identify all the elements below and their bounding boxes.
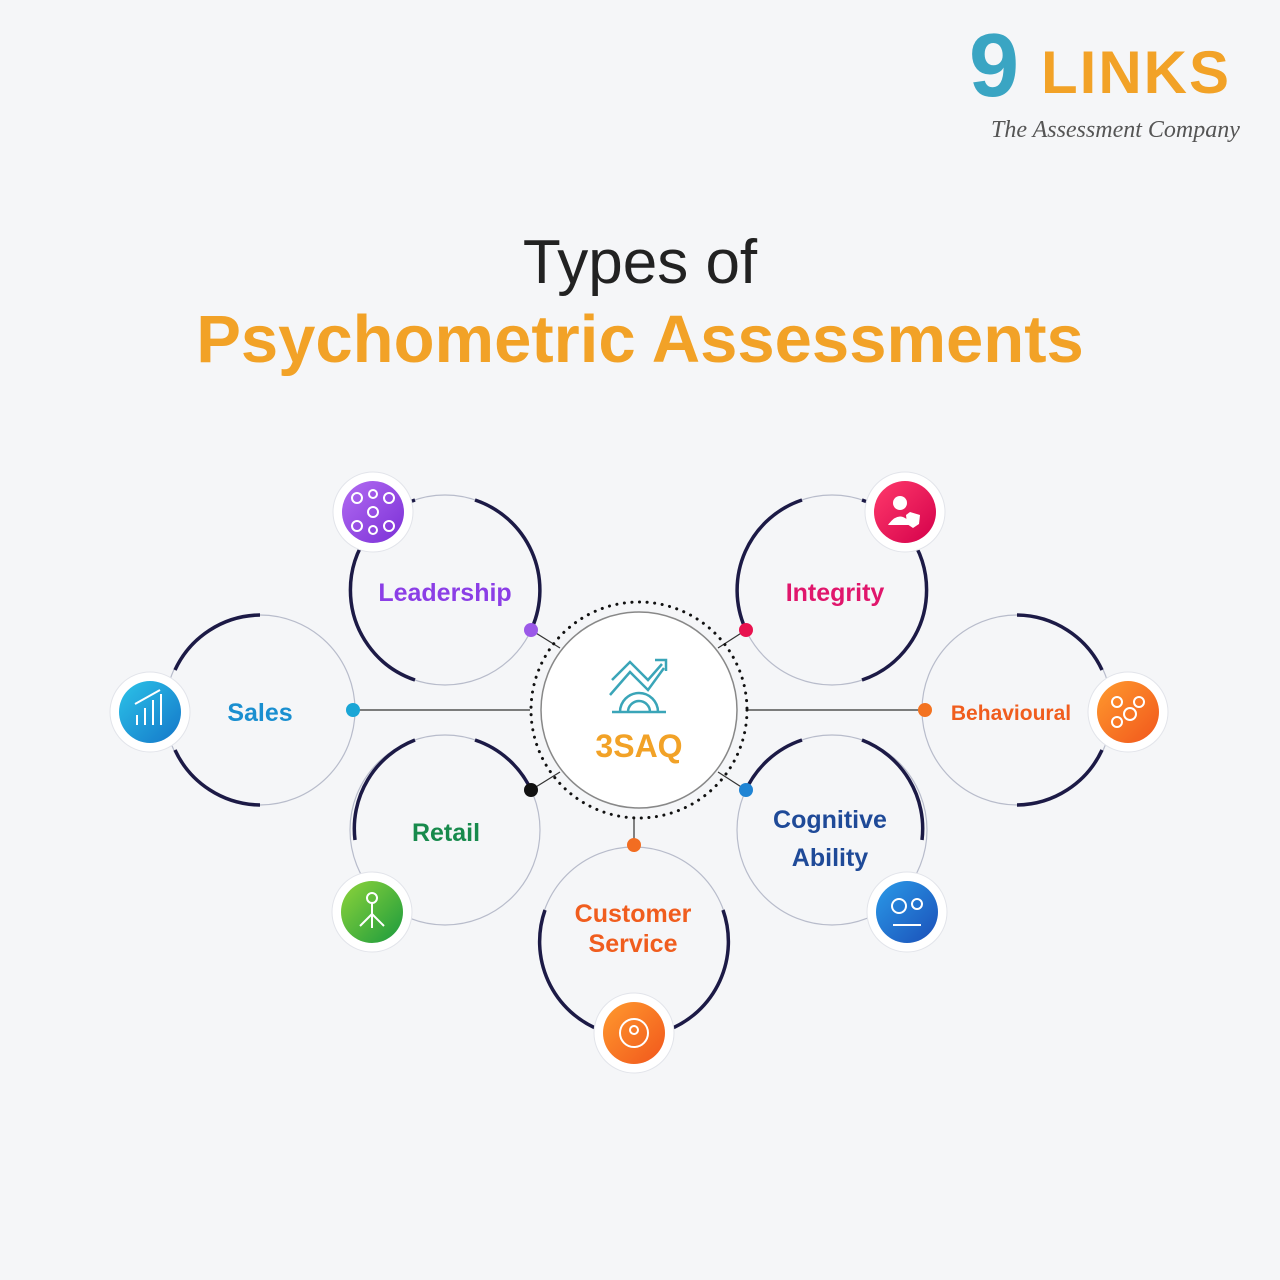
title [196, 228, 1084, 377]
center hub [531, 602, 747, 818]
icons [110, 472, 1168, 1073]
satellite circles [165, 495, 1112, 1037]
dots [346, 623, 932, 852]
title: Psychometric Assessments [196, 302, 1084, 377]
logo tagline: The Assessment Company [991, 117, 1240, 143]
connector lines [353, 630, 925, 845]
icon: growth gear [610, 660, 666, 712]
labels: Service [589, 930, 678, 958]
labels: Ability [792, 844, 868, 872]
logo mark: 9: 9 [969, 16, 1019, 116]
labels: Cognitive [773, 806, 887, 834]
logo word: LINKS: LINKS [1041, 39, 1231, 106]
title: Types of [523, 228, 757, 297]
labels [227, 579, 1071, 958]
labels: Sales [227, 699, 293, 727]
labels: Customer [575, 900, 692, 928]
labels: Integrity [786, 579, 884, 607]
center hub: 3SAQ [595, 728, 683, 764]
logo [969, 16, 1240, 143]
labels: Retail [412, 819, 480, 847]
labels: Leadership [378, 579, 512, 607]
labels: Behavioural [951, 702, 1071, 725]
